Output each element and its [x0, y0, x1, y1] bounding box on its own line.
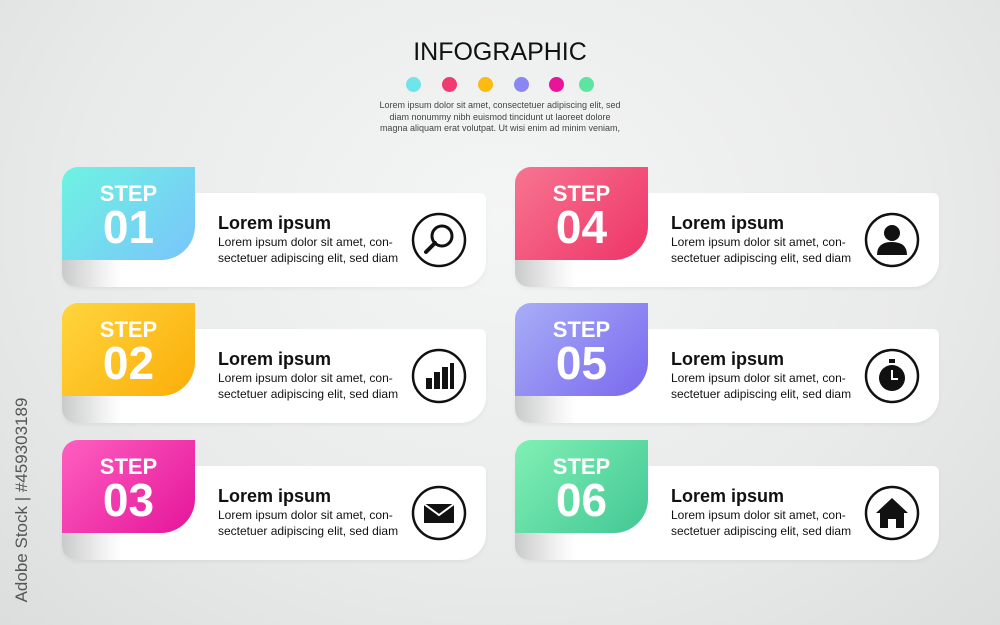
panel: step 06: [515, 440, 939, 561]
panel: step 03: Lorem ipsum dolor sit amet, con-: [218, 508, 393, 522]
panel: step 04: STEP: [553, 181, 610, 206]
panel: step 02: sectetuer adipiscing elit, sed diam: [218, 386, 398, 400]
icon: mail: [412, 486, 466, 540]
panel: step 02: [62, 303, 486, 424]
panel: step 06: sectetuer adipiscing elit, sed diam: [671, 524, 851, 538]
panel: step 05: Lorem ipsum: [671, 349, 784, 369]
panel: step 02: STEP: [100, 317, 157, 342]
panel: step 03: [62, 440, 486, 561]
panel: step 03: 03: [103, 474, 154, 526]
icon: user: [864, 212, 920, 268]
intro text: diam nonummy nibh euismod tincidunt ut laoreet dolore: [389, 112, 611, 122]
icon: bar chart: [412, 348, 466, 404]
icon: home: [864, 486, 920, 540]
panel: step 03: Lorem ipsum: [218, 486, 331, 506]
intro text: magna aliquam erat volutpat. Ut wisi enim ad minim veniam,: [380, 123, 620, 133]
panel: step 05: 05: [556, 337, 607, 389]
panel: step 04: sectetuer adipiscing elit, sed diam: [671, 250, 851, 264]
intro text: [379, 100, 621, 133]
color dots: [406, 77, 594, 92]
panel: step 06: Lorem ipsum dolor sit amet, con-: [671, 508, 846, 522]
panel: step 04: 04: [556, 201, 607, 253]
panel: step 05: [515, 303, 939, 424]
watermark side text: Adobe Stock | #459303189: [12, 398, 31, 602]
panel: step 04: Lorem ipsum: [671, 213, 784, 233]
panel: step 05: Lorem ipsum dolor sit amet, con-: [671, 371, 846, 385]
panel: step 01: [62, 167, 486, 288]
panel: step 05: STEP: [553, 317, 610, 342]
panel: step 04: Lorem ipsum dolor sit amet, con-: [671, 235, 846, 249]
panel: step 01: Lorem ipsum: [218, 213, 331, 233]
panel: step 01: sectetuer adipiscing elit, sed diam: [218, 250, 398, 264]
panel: step 02: 02: [103, 337, 154, 389]
panel: step 03: STEP: [100, 454, 157, 479]
panel: step 01: 01: [103, 201, 154, 253]
intro text: Lorem ipsum dolor sit amet, consectetuer adipiscing elit, sed: [379, 100, 621, 110]
icon: timer: [864, 348, 920, 404]
panel: step 06: 06: [556, 474, 607, 526]
panel: step 06: Lorem ipsum: [671, 486, 784, 506]
panel: step 05: sectetuer adipiscing elit, sed diam: [671, 386, 851, 400]
panel: step 01: STEP: [100, 181, 157, 206]
panel: step 02: Lorem ipsum: [218, 349, 331, 369]
panel: step 03: sectetuer adipiscing elit, sed diam: [218, 524, 398, 538]
panel: step 01: Lorem ipsum dolor sit amet, con-: [218, 235, 393, 249]
title: INFOGRAPHIC: [413, 38, 587, 66]
icon: search: [412, 212, 466, 268]
panel: step 02: Lorem ipsum dolor sit amet, con-: [218, 371, 393, 385]
panel: step 06: STEP: [553, 454, 610, 479]
panel: step 04: [515, 167, 939, 288]
